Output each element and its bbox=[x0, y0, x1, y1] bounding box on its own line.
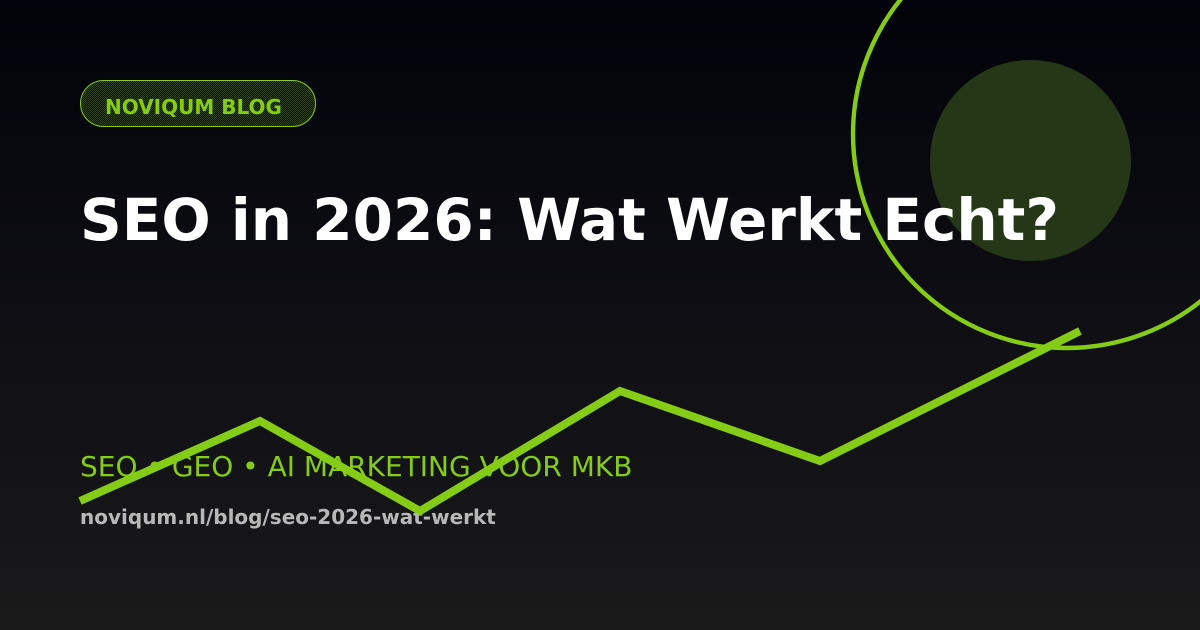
subtitle: SEO • GEO • AI MARKETING VOOR MKB bbox=[80, 450, 632, 483]
decorative ring bbox=[853, 0, 1200, 348]
badge: Noviqum Blog bbox=[80, 80, 316, 126]
trend line chart bbox=[80, 331, 1080, 511]
url: noviqum.nl/blog/seo-2026-wat-werkt bbox=[80, 505, 496, 529]
badge: Noviqum Blog: NOVIQUM BLOG bbox=[105, 95, 282, 119]
title: SEO in 2026: Wat Werkt Echt? bbox=[80, 186, 1059, 254]
decorative filled circle bbox=[930, 60, 1131, 261]
